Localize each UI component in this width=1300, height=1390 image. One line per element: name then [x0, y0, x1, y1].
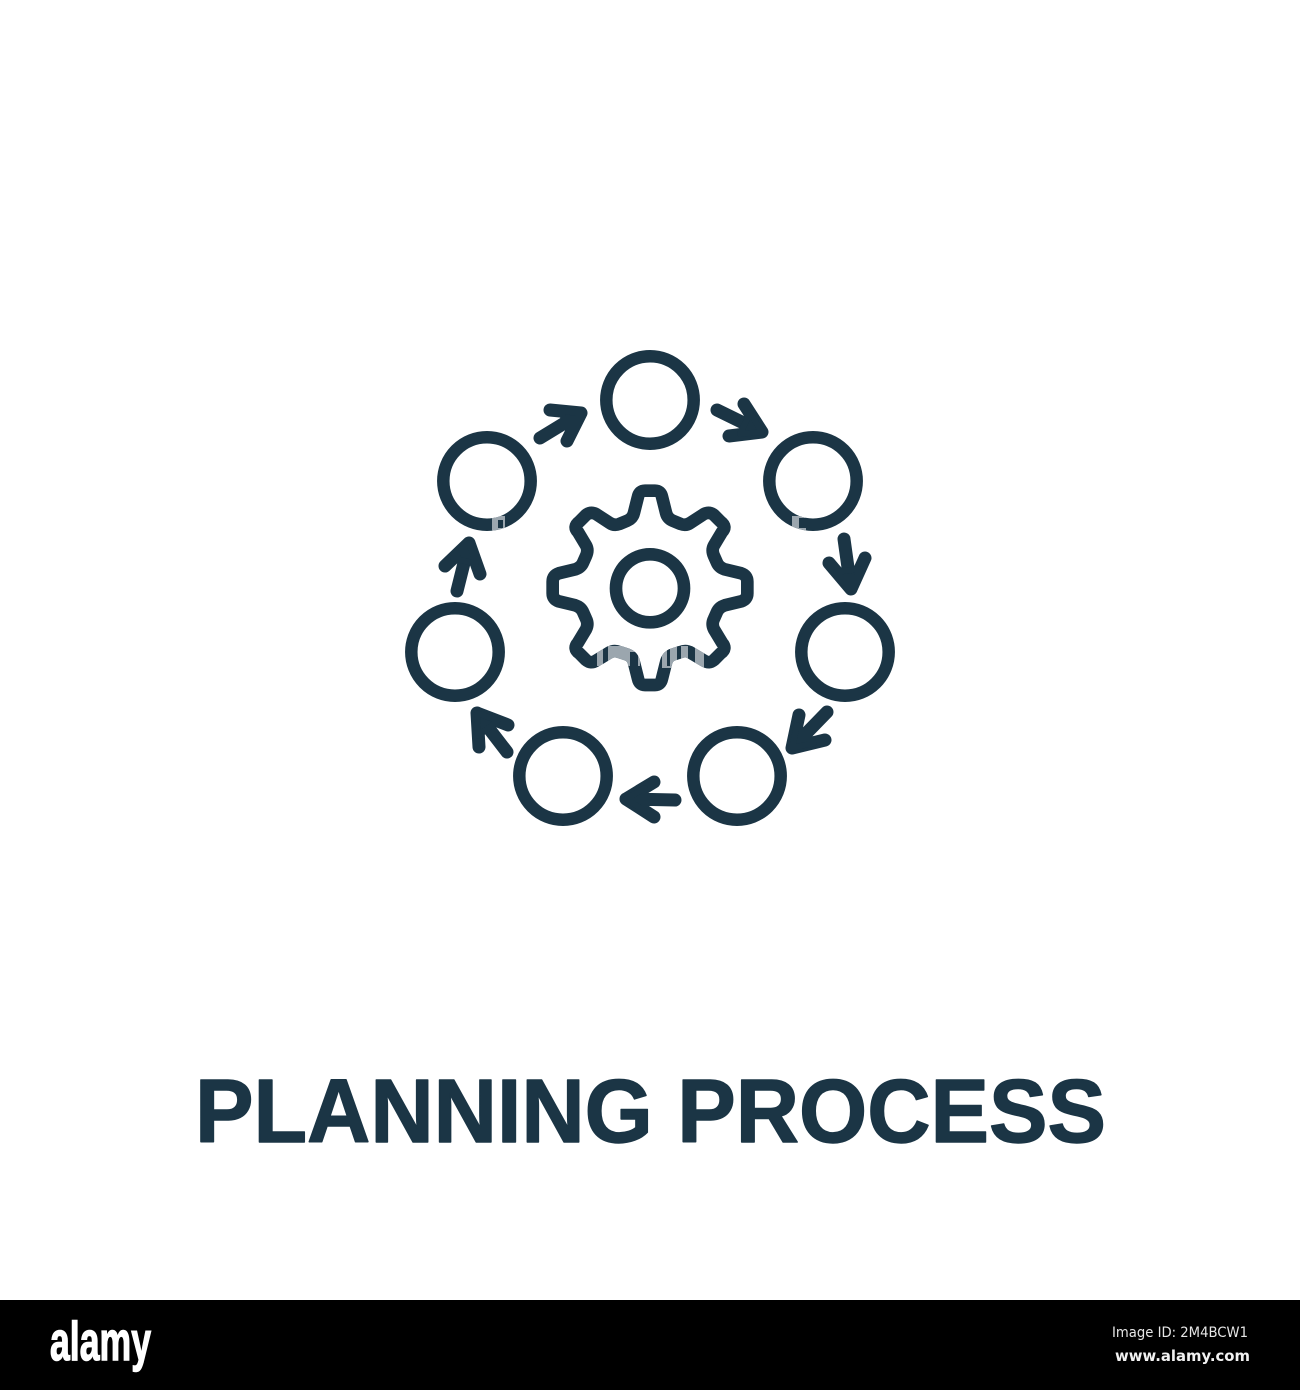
- arrow: top to upper right: [717, 404, 762, 436]
- icon: planning process cycle: [411, 356, 889, 820]
- title: PLANNING PROCESS: [195, 1062, 1106, 1162]
- image id: Image ID: 2M4BCW1: [1112, 1325, 1248, 1341]
- infographic canvas: [0, 350, 1300, 1390]
- step circle: upper right: [769, 437, 857, 525]
- arrow: right to lower right: [792, 712, 827, 748]
- step circle: left: [411, 608, 499, 696]
- step circle: right: [801, 608, 889, 696]
- step circle: lower right: [693, 732, 781, 820]
- watermark traces on gear and circles: [492, 516, 806, 668]
- website: www.alamy.com: [1115, 1347, 1250, 1365]
- icon: central gear: [553, 491, 747, 685]
- arrow: lower left to left: [477, 713, 508, 752]
- arrow: left to upper left: [445, 543, 480, 591]
- gear hub: [616, 554, 684, 622]
- arrow: upper right to right: [829, 539, 865, 589]
- arrow: lower right to lower left: [626, 782, 675, 817]
- step circle: upper left: [443, 437, 531, 525]
- footer bar: [0, 1300, 1300, 1390]
- step circle: lower left: [519, 732, 607, 820]
- arrow: upper left to top: [540, 410, 581, 441]
- step circle: top: [606, 356, 694, 444]
- footer logo: alamy: [50, 1310, 151, 1372]
- gear outline: [553, 491, 747, 685]
